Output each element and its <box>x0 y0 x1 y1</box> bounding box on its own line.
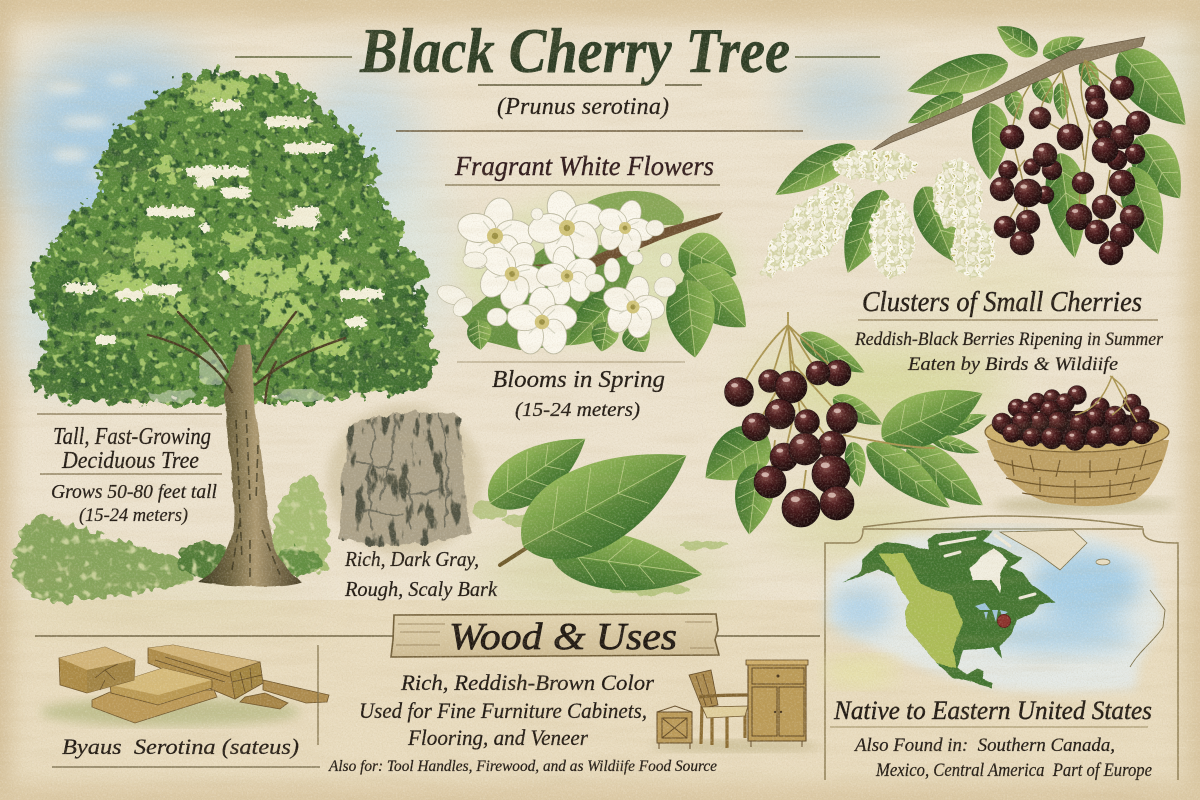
sky gaps under canopy <box>148 350 326 402</box>
text: bark caption: Rich, Dark Gray, <box>344 547 479 571</box>
chair <box>701 706 745 748</box>
north america land <box>843 530 1055 688</box>
illustration: large leaves <box>472 417 730 602</box>
stems <box>741 312 935 508</box>
vertical rule <box>317 645 319 745</box>
text: tree description: (15-24 meters) <box>79 505 188 526</box>
text: tree description: Deciduous Tree <box>61 448 199 474</box>
illustration: cherry branch with blossoms <box>762 17 1200 281</box>
cube block <box>59 647 135 693</box>
canopy <box>30 70 437 403</box>
illustration: cut lumber pile <box>40 645 329 745</box>
subtitle: (Prunus serotina) <box>497 94 669 120</box>
ground shrubs <box>12 475 329 601</box>
stems <box>1002 60 1138 253</box>
text: native range: Also Found in: Southern Canada, <box>853 735 1115 756</box>
title: Black Cherry Tree <box>359 16 790 86</box>
lower plank <box>92 690 217 723</box>
illustration: basket of cherries <box>985 376 1175 513</box>
hudson bay <box>968 548 1007 593</box>
ocean <box>830 536 1165 693</box>
flower racemes <box>762 150 995 278</box>
top plank <box>110 668 212 705</box>
trunk <box>198 345 302 587</box>
clouds <box>45 76 134 179</box>
text: bark caption: Rough, Scaly Bark <box>344 577 498 601</box>
side table <box>657 712 692 743</box>
branches <box>148 312 345 403</box>
text: wood uses: Rich, Reddish-Brown Color <box>400 670 654 695</box>
branch <box>530 212 723 272</box>
text: wood uses <box>328 670 717 775</box>
text: wood uses: Also for: Tool Handles, Firewood, and as Wildiife Food Source <box>328 758 717 775</box>
top foliage <box>588 191 684 225</box>
text: clusters of small cherries <box>854 287 1164 375</box>
sky: left <box>10 45 455 380</box>
text: bark caption <box>344 547 498 601</box>
great lakes <box>975 603 1008 622</box>
cabinet <box>748 664 806 741</box>
text: clusters of small cherries: Clusters of Small Cherries <box>862 287 1142 318</box>
meadow wash <box>10 193 1090 607</box>
text: blooms in spring <box>457 362 685 421</box>
branch <box>868 37 1145 153</box>
underlay foliage <box>460 240 640 350</box>
text: blooms in spring: Blooms in Spring <box>492 367 665 393</box>
text: tree description <box>37 414 222 526</box>
long beam <box>148 645 263 699</box>
text: tree description: Grows 50-80 feet tall <box>51 481 217 503</box>
sky: right <box>790 30 1200 130</box>
text: wood uses: Used for Fine Furniture Cabinets, <box>359 698 647 723</box>
text: clusters of small cherries: Eaten by Birds & Wildiife <box>907 354 1118 375</box>
heading sign: wood and uses <box>35 614 820 658</box>
illustration: flowering branch <box>435 181 764 360</box>
text: native range: Mexico, Central America Part of Europe <box>875 761 1152 781</box>
divider under subtitle <box>396 130 803 132</box>
location marker <box>998 614 1010 628</box>
greenland and europe outline <box>1000 530 1087 570</box>
illustration: bark <box>327 405 483 555</box>
text: native range <box>830 696 1152 781</box>
buds <box>435 208 676 326</box>
small planks <box>263 680 329 703</box>
cherries <box>990 76 1150 265</box>
illustration: hanging cherry cluster <box>691 312 995 537</box>
text: tree description: Tall, Fast-Growing <box>53 424 211 450</box>
illustration: wooden furniture <box>650 660 820 752</box>
heading sign: wood and uses: Wood & Uses <box>449 616 677 658</box>
heading: fragrant white flowers: Fragrant White Flowers <box>454 151 714 181</box>
text: lumber caption: Byaus Serotina (sateus) <box>62 734 299 759</box>
blossoms <box>70 105 379 340</box>
text: wood uses: Flooring, and Veneer <box>407 725 588 750</box>
illustration: black cherry tree <box>12 70 437 601</box>
text: native range: Native to Eastern United States <box>833 696 1152 725</box>
text: clusters of small cherries: Reddish-Black Berries Ripening in Summer <box>854 329 1164 350</box>
panel: native range map <box>824 516 1178 780</box>
panel frame <box>825 516 1178 780</box>
text: blooms in spring: (15-24 meters) <box>515 399 640 421</box>
